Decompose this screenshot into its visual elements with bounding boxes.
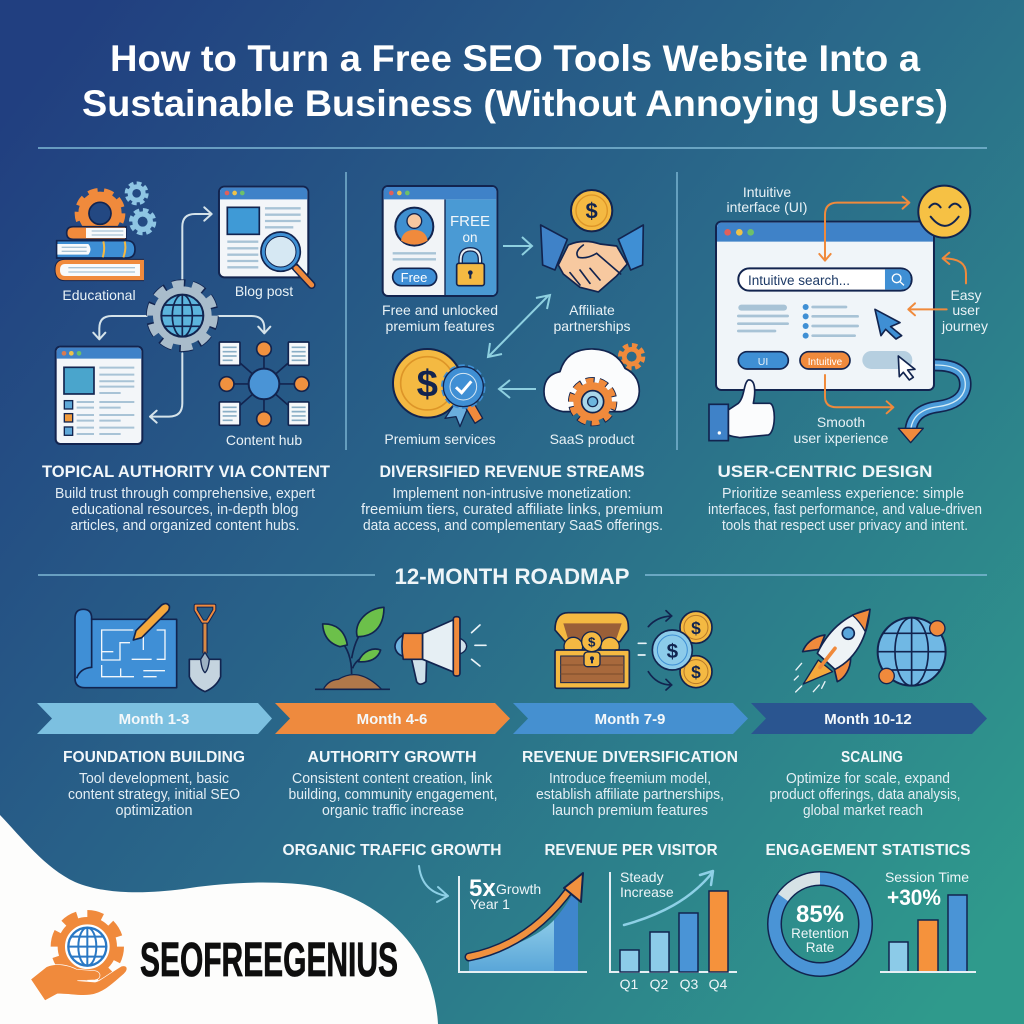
bars bbox=[620, 891, 728, 972]
icon: treasure chest and coins: $ bbox=[667, 640, 679, 663]
text: authority body: building, community engagement, bbox=[288, 787, 498, 803]
chart: revenue per visitor bbox=[544, 842, 737, 992]
chevron: month 7-9 bbox=[513, 703, 748, 734]
label: easy user journey: user bbox=[952, 302, 980, 318]
text: free pill and unlock labels: on bbox=[462, 230, 478, 245]
heading: topical authority: TOPICAL AUTHORITY VIA CONTENT bbox=[42, 462, 331, 481]
quarter labels: Q3 bbox=[680, 976, 699, 992]
donut: 85% retention bbox=[768, 872, 872, 976]
text: authority body bbox=[288, 771, 498, 819]
text: foundation body: Tool development, basic bbox=[79, 771, 229, 787]
label: saas product: SaaS product bbox=[550, 431, 635, 447]
text: free pill and unlock labels: FREE bbox=[450, 213, 490, 230]
label: intuitive interface bbox=[727, 184, 807, 215]
icon: gear globe hand bbox=[31, 914, 127, 1001]
arrows: orange journey arrows bbox=[819, 197, 966, 413]
icon: blog post window bbox=[219, 187, 312, 285]
text: user-centric body bbox=[708, 486, 982, 534]
icon: content hub bbox=[219, 342, 309, 426]
heading: revenue per visitor: REVENUE PER VISITOR bbox=[544, 842, 718, 859]
heading: revenue diversification: REVENUE DIVERSIFICATION bbox=[522, 749, 738, 766]
donut: 85% retention: Retention bbox=[791, 926, 849, 941]
label: free and unlocked: Free and unlocked bbox=[382, 302, 498, 318]
text: revenue body bbox=[536, 771, 724, 819]
panel: diversified revenue streams bbox=[361, 186, 663, 534]
icon: treasure chest and coins: $ bbox=[588, 635, 596, 650]
text: scaling body: Optimize for scale, expand bbox=[786, 771, 950, 787]
text: free pill and unlock labels bbox=[401, 213, 490, 285]
chevron: month 4-6 bbox=[275, 703, 510, 734]
heading: organic traffic growth: ORGANIC TRAFFIC GROWTH bbox=[282, 842, 502, 859]
text: 5x growth: Year 1 bbox=[470, 896, 510, 912]
label: content hub: Content hub bbox=[226, 432, 302, 448]
icon: premium coin and badge: $ bbox=[417, 363, 438, 406]
heading: 12-month roadmap: 12-MONTH ROADMAP bbox=[394, 564, 630, 589]
icon: treasure chest and coins bbox=[555, 611, 712, 690]
label: affiliate partnerships bbox=[553, 302, 631, 334]
icon: cloud and gears bbox=[544, 347, 642, 422]
text: revenue body: establish affiliate partnerships, bbox=[536, 787, 724, 803]
text: search and pill labels: UI bbox=[758, 356, 768, 368]
label: intuitive interface: interface (UI) bbox=[727, 199, 807, 215]
growth arrow bbox=[469, 873, 583, 957]
text: authority body: organic traffic increase bbox=[322, 803, 464, 819]
label: premium services: Premium services bbox=[384, 431, 496, 447]
text: steady increase: Increase bbox=[620, 884, 674, 900]
text: authority body: Consistent content creation, link bbox=[292, 771, 493, 787]
icon: blueprint and shovel bbox=[75, 604, 221, 692]
label: affiliate partnerships: partnerships bbox=[553, 318, 631, 334]
white corner shape bbox=[0, 815, 438, 1024]
icon: premium coin and badge bbox=[393, 349, 484, 427]
connector arrows bbox=[93, 207, 270, 423]
text: foundation body bbox=[68, 771, 240, 819]
text: topical authority body: educational resources, in-depth blog bbox=[72, 502, 298, 518]
text: topical authority body: Build trust through comprehensive, expert bbox=[55, 486, 315, 502]
text: diversified revenue body: freemium tiers, curated affiliate links, premium bbox=[361, 502, 663, 518]
chart: engagement statistics bbox=[766, 842, 976, 976]
text: diversified revenue body: Implement non-intrusive monetization: bbox=[392, 486, 632, 502]
icon: treasure chest and coins: $ bbox=[691, 662, 701, 682]
label: educational: Educational bbox=[62, 287, 136, 303]
text: scaling body: product offerings, data analysis, bbox=[770, 787, 960, 803]
text: search and pill labels: Intuitive bbox=[808, 357, 843, 368]
text: user-centric body: Prioritize seamless experience: simple bbox=[722, 486, 964, 502]
label: month 1-3: Month 1-3 bbox=[119, 711, 189, 728]
label: month 7-9: Month 7-9 bbox=[595, 711, 665, 728]
label: easy user journey bbox=[941, 287, 988, 334]
icon: free and premium window bbox=[383, 186, 497, 296]
label: intuitive interface: Intuitive bbox=[743, 184, 791, 200]
panel: topical authority via content bbox=[42, 185, 331, 534]
text: scaling body: global market reach bbox=[803, 803, 923, 819]
text: session time +30%: +30% bbox=[887, 885, 941, 910]
donut: 85% retention: 85% bbox=[796, 901, 844, 928]
text: diversified revenue body bbox=[361, 486, 663, 534]
text: free pill and unlock labels: Free bbox=[401, 270, 427, 285]
area fill bbox=[469, 885, 578, 971]
donut: 85% retention: Rate bbox=[806, 940, 834, 955]
text: 5x growth bbox=[469, 875, 541, 912]
logo: seofreegenius bbox=[31, 914, 398, 1001]
icon: sprout and megaphone bbox=[315, 607, 486, 689]
bars: session time bbox=[889, 895, 967, 972]
icon: coin: $ bbox=[586, 198, 598, 223]
roadmap: month 1-3 bbox=[37, 604, 272, 819]
icon: coin bbox=[571, 190, 612, 231]
icon: rocket and globe bbox=[794, 609, 946, 692]
heading: authority growth: AUTHORITY GROWTH bbox=[308, 749, 476, 766]
icon: handshake bbox=[541, 225, 643, 292]
text: 5x growth: 5x bbox=[469, 875, 496, 902]
icon: books and gears bbox=[55, 185, 153, 281]
heading: diversified revenue: DIVERSIFIED REVENUE STREAMS bbox=[380, 462, 644, 481]
text: user-centric body: tools that respect user privacy and intent. bbox=[722, 518, 968, 534]
label: affiliate partnerships: Affiliate bbox=[569, 302, 615, 318]
roadmap: month 4-6 bbox=[275, 607, 510, 819]
title: Sustainable Business (Without Annoying Users) bbox=[82, 83, 948, 124]
heading: scaling: SCALING bbox=[841, 749, 903, 766]
text: search and pill labels: Intuitive search... bbox=[748, 273, 850, 288]
chevron: month 10-12 bbox=[751, 703, 987, 734]
icon: article window bbox=[56, 347, 142, 444]
quarter labels: Q1 bbox=[620, 976, 639, 992]
label: free and unlocked: premium features bbox=[386, 318, 494, 334]
text: session time +30%: Session Time bbox=[885, 869, 969, 885]
quarter labels: Q4 bbox=[709, 976, 728, 992]
heading: foundation building: FOUNDATION BUILDING bbox=[63, 749, 245, 766]
heading: engagement statistics: ENGAGEMENT STATISTICS bbox=[766, 842, 971, 859]
label: smooth experience bbox=[794, 414, 889, 446]
icon: interface window bbox=[716, 222, 934, 390]
label: blog post: Blog post bbox=[235, 283, 293, 299]
chevron: month 1-3 bbox=[37, 703, 272, 734]
arrow: double arrow bbox=[488, 295, 550, 357]
text: 5x growth: Growth bbox=[496, 881, 541, 897]
heading: user-centric design: USER-CENTRIC DESIGN bbox=[718, 462, 932, 481]
arrow: saas to premium bbox=[499, 380, 536, 398]
label: easy user journey: journey bbox=[941, 318, 988, 334]
text: revenue body: launch premium features bbox=[552, 803, 708, 819]
text: steady increase: Steady bbox=[620, 869, 664, 885]
text: revenue body: Introduce freemium model, bbox=[549, 771, 711, 787]
text: topical authority body: articles, and organized content hubs. bbox=[70, 518, 300, 534]
text: search and pill labels bbox=[748, 273, 850, 368]
icon: thumbs up bbox=[709, 380, 774, 441]
title: How to Turn a Free SEO Tools Website Into a bbox=[110, 38, 920, 79]
label: month 10-12: Month 10-12 bbox=[824, 711, 912, 728]
text: foundation body: content strategy, initial SEO bbox=[68, 787, 240, 803]
title bbox=[82, 38, 948, 124]
label: easy user journey: Easy bbox=[950, 287, 982, 303]
arrow: steady increase bbox=[624, 871, 713, 925]
wordmark: SEOFREEGENIUS bbox=[140, 934, 398, 987]
label: smooth experience: Smooth bbox=[817, 414, 865, 430]
label: free and unlocked bbox=[382, 302, 498, 334]
panel: user-centric design bbox=[708, 184, 988, 534]
text: topical authority body bbox=[55, 486, 315, 534]
quarter labels: Q2 bbox=[650, 976, 669, 992]
icon: treasure chest and coins: $ bbox=[691, 618, 701, 638]
arrow: free to affiliate bbox=[503, 237, 532, 255]
roadmap: month 10-12 bbox=[751, 609, 987, 819]
text: user-centric body: interfaces, fast performance, and value-driven bbox=[708, 502, 982, 518]
chart: organic traffic growth bbox=[282, 842, 587, 972]
label: smooth experience: user ixperience bbox=[794, 430, 889, 446]
text: diversified revenue body: data access, and complementary SaaS offerings. bbox=[363, 518, 663, 534]
text: steady increase bbox=[620, 869, 674, 900]
arrow: pointer to chart bbox=[419, 866, 448, 902]
text: scaling body bbox=[770, 771, 960, 819]
quarter labels bbox=[620, 976, 728, 992]
text: session time +30% bbox=[885, 869, 969, 910]
label: month 4-6: Month 4-6 bbox=[357, 711, 427, 728]
roadmap: month 7-9 bbox=[513, 611, 748, 819]
icon: curved journey arrow bbox=[898, 365, 965, 443]
icon: central globe gear bbox=[151, 284, 214, 347]
text: foundation body: optimization bbox=[116, 803, 192, 819]
icon: smiley bbox=[918, 186, 970, 238]
